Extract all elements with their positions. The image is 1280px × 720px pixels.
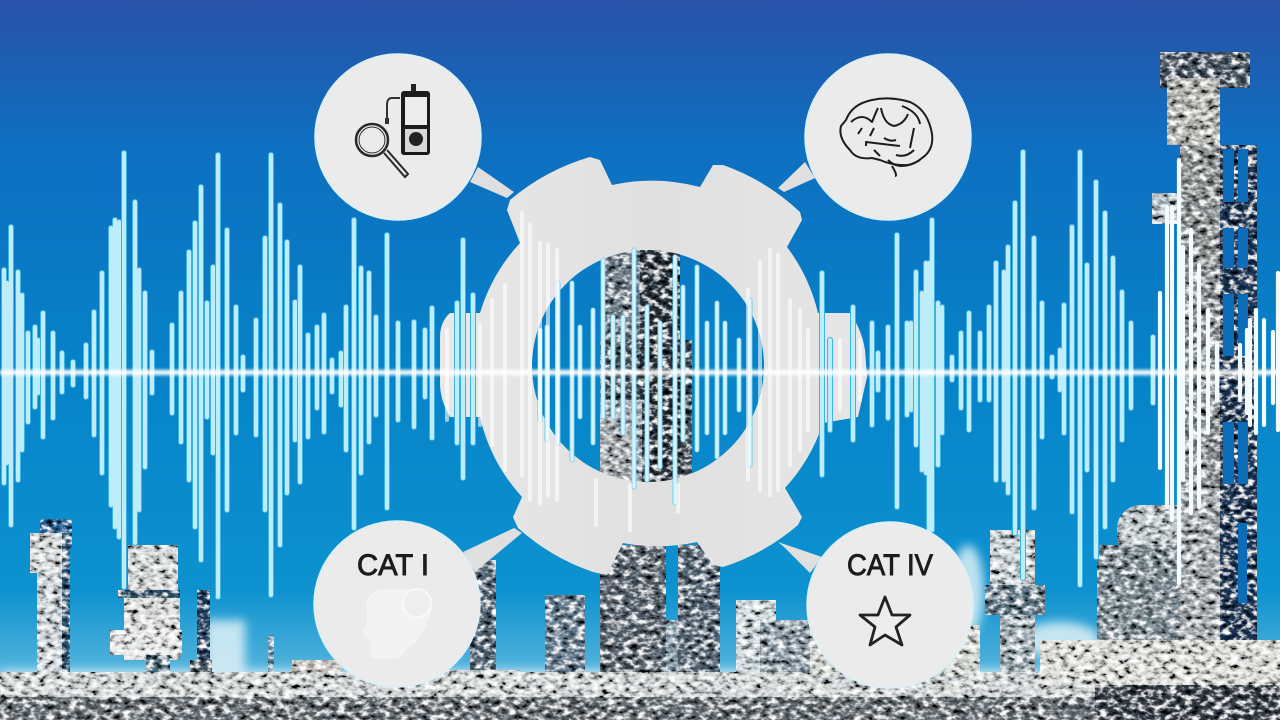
sound waveform: [0, 152, 1280, 597]
bubble: CAT IV: [807, 522, 973, 688]
red storage tank: [328, 680, 378, 720]
bubble: brain: [805, 54, 971, 220]
waveform bars right: [822, 152, 1153, 585]
tower frame windows: [1223, 149, 1248, 603]
refinery left towers: [30, 519, 520, 720]
waveform centre line: [0, 370, 1280, 375]
gear: [440, 157, 867, 575]
connector: bottom-left bubble to gear: [463, 528, 522, 572]
icon: handheld tester: [385, 84, 430, 155]
refinery ground band: [0, 625, 1280, 720]
haze at horizon: [0, 545, 1280, 700]
bubble: CAT I: [314, 521, 480, 687]
waveform bars left: [4, 153, 473, 597]
label: CAT IV: CAT IV: [847, 549, 933, 582]
waveform bars over gear face: [447, 213, 860, 530]
connector: bottom-right bubble to gear: [778, 542, 822, 573]
label: CAT I: CAT I: [357, 549, 429, 582]
connector: top-right bubble to gear: [778, 162, 815, 192]
waveform bars over right tower: [1160, 160, 1278, 583]
icon: brain outline: [840, 98, 932, 176]
icon: star: [860, 597, 910, 645]
icon: pale head silhouette: [363, 589, 432, 659]
icon: magnifying glass: [356, 124, 408, 177]
waveform bars through gear hole: [540, 250, 750, 503]
refinery middle and right units: [736, 52, 1257, 700]
connector: top-left bubble to gear: [470, 167, 514, 198]
central tower seen through gear: [545, 250, 720, 720]
bubble: tester and magnifier: [315, 54, 481, 220]
